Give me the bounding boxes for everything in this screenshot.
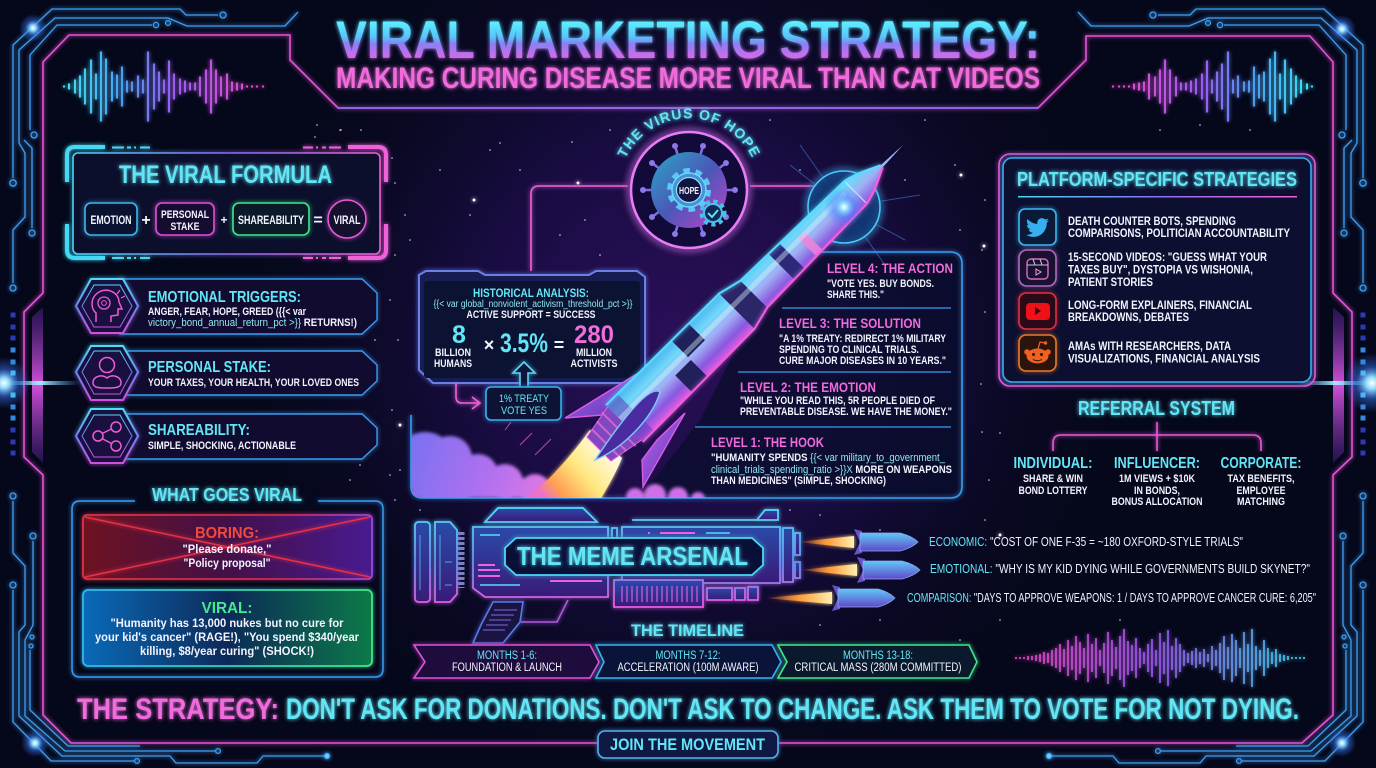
stat: 8 billion humans: BILLION <box>435 347 471 359</box>
heading: emotional triggers: EMOTIONAL TRIGGERS: <box>148 289 301 306</box>
stat: 8 billion humans: HUMANS <box>434 358 472 370</box>
text: emotional triggers body <box>148 306 357 329</box>
text: twitter <box>1068 214 1290 240</box>
timeline: phase 1: MONTHS 1-6: <box>477 650 537 662</box>
gun barrel <box>622 527 780 583</box>
circuit traces: bottom right <box>1046 493 1366 763</box>
text: level 3: CURE MAJOR DISEASES IN 10 YEARS." <box>779 355 946 367</box>
strategy statement: THE STRATEGY: <box>77 693 279 726</box>
arrow: vote up to 3.5 percent <box>513 362 535 387</box>
panel: the viral formula <box>67 147 386 258</box>
subtitle: MAKING CURING DISEASE MORE VIRAL THAN CAT VIDEOS <box>336 62 1040 95</box>
arc title <box>619 118 759 200</box>
text: level 4 <box>827 260 953 301</box>
timeline: phase 3 <box>778 645 977 678</box>
card: boring: "Please donate," <box>182 542 272 556</box>
tier: influencer: INFLUENCER: <box>1114 455 1200 472</box>
card: viral: your kid's cancer" (RAGE!), "You spend $340/year <box>95 630 359 644</box>
formula: viral: VIRAL <box>334 215 360 227</box>
card: viral: "Humanity has 13,000 nukes but no cure for <box>110 616 344 630</box>
text: level 4: LEVEL 4: THE ACTION <box>827 260 953 276</box>
text: reels: 15-SECOND VIDEOS: "GUESS WHAT YOUR <box>1068 250 1267 264</box>
text: reddit: VISUALIZATIONS, FINANCIAL ANALYSIS <box>1068 352 1260 366</box>
panel: shareability <box>76 409 377 463</box>
heading: referral system: REFERRAL SYSTEM <box>1078 398 1235 420</box>
timeline: phase 1: FOUNDATION & LAUNCH <box>452 662 562 674</box>
tier: corporate <box>1220 455 1302 508</box>
stat: 280 million activists: MILLION <box>576 347 612 359</box>
text: level 4: "VOTE YES. BUY BONDS. <box>827 278 934 290</box>
formula: emotion <box>85 203 137 235</box>
text: level 2: PREVENTABLE DISEASE. WE HAVE THE MONEY." <box>740 406 952 418</box>
formula: equals: = <box>313 212 323 229</box>
icon: youtube <box>1019 293 1056 329</box>
callout: treaty vote yes: 1% TREATY <box>499 393 550 405</box>
circuit traces: top right <box>1078 9 1366 291</box>
formula: personal stake <box>156 203 214 235</box>
card: viral: VIRAL: <box>202 600 252 617</box>
icon: check gear <box>702 202 724 224</box>
button: join the movement <box>598 731 778 758</box>
arrow: humans to treaty vote <box>456 383 480 409</box>
text: level 2: LEVEL 2: THE EMOTION <box>740 379 876 395</box>
text: historical analysis heading: HISTORICAL ANALYSIS: <box>473 286 589 300</box>
projectile: emotional <box>800 557 920 583</box>
tier: corporate: TAX BENEFITS, <box>1228 473 1294 485</box>
tier: corporate: CORPORATE: <box>1220 455 1302 472</box>
tier: influencer: IN BONDS, <box>1134 485 1180 497</box>
icon: twitter <box>1019 209 1056 245</box>
title <box>336 11 1040 95</box>
connector lines to virus <box>531 186 815 271</box>
text: youtube: LONG-FORM EXPLAINERS, FINANCIAL <box>1068 298 1252 312</box>
text: reels: PATIENT STORIES <box>1068 275 1153 289</box>
icon: reddit <box>1019 335 1056 371</box>
text: reddit <box>1068 339 1260 366</box>
card: viral <box>83 590 372 666</box>
gun receiver <box>473 527 608 597</box>
gun muzzle <box>783 528 793 582</box>
heading: the timeline: THE TIMELINE <box>631 621 744 640</box>
formula: viral <box>328 200 366 238</box>
tier: individual: SHARE & WIN <box>1023 473 1083 485</box>
text: emotional triggers body: victory_bond_annual_return_pct >}} RETURNS!) <box>148 317 357 329</box>
text: historical analysis heading <box>434 286 633 321</box>
stat: 280 million activists <box>570 321 618 370</box>
heading: the viral formula: THE VIRAL FORMULA <box>119 161 332 189</box>
text: personal stake body: YOUR TAXES, YOUR HEALTH, YOUR LOVED ONES <box>148 377 359 389</box>
virus body <box>643 146 735 234</box>
text: level 1: THAN MEDICINES" (SIMPLE, SHOCKING) <box>711 475 886 487</box>
heading: platform-specific strategies: PLATFORM-SPECIFIC STRATEGIES <box>1017 169 1297 191</box>
gun rear cap <box>415 522 430 602</box>
text: level 2: "WHILE YOU READ THIS, 5R PEOPLE DIED OF <box>740 395 935 407</box>
formula: plus: + <box>220 213 228 227</box>
timeline: phase 1 <box>414 645 599 678</box>
tier: individual <box>1014 455 1092 497</box>
text: reels: TAXES BUY", DYSTOPIA VS WISHONIA, <box>1068 262 1253 276</box>
icon: share <box>76 409 138 463</box>
illustration: meme gun <box>415 508 800 643</box>
tier: influencer: 1M VIEWS + $10K <box>1119 473 1195 485</box>
panel: personal stake <box>76 346 377 400</box>
text: twitter: COMPARISONS, POLITICIAN ACCOUNTABILITY <box>1068 226 1290 240</box>
text: level 1: LEVEL 1: THE HOOK <box>711 434 824 450</box>
projectile: comparison <box>764 585 895 611</box>
text: level 1: "HUMANITY SPENDS {{< var military_to_government_ <box>711 452 946 464</box>
waveform: top right <box>1113 52 1312 122</box>
icon: person <box>76 346 138 400</box>
stat: 8 billion humans: 8 <box>452 321 466 349</box>
formula: shareability <box>233 203 309 235</box>
text: level 2 <box>740 379 952 418</box>
rocket centre fin <box>595 391 660 460</box>
panel: historical analysis <box>419 271 645 383</box>
formula: personal stake: STAKE <box>170 221 200 233</box>
text: level 1: clinical_trials_spending_ratio >}}X MORE ON WEAPONS <box>711 464 952 476</box>
callout: treaty vote yes: VOTE YES <box>501 405 547 417</box>
formula: plus: + <box>141 212 151 229</box>
text: twitter: DEATH COUNTER BOTS, SPENDING <box>1068 214 1236 228</box>
rocket body <box>586 145 903 462</box>
text: level 3: SPENDING TO CLINICAL TRIALS. <box>779 344 919 356</box>
card: boring: BORING: <box>195 525 259 542</box>
gun lower grill <box>614 580 703 607</box>
virus body: HOPE <box>679 186 699 197</box>
tier: influencer: BONUS ALLOCATION <box>1112 496 1203 508</box>
formula: shareability: SHAREABILITY <box>238 215 304 227</box>
side accent bars <box>32 307 1344 463</box>
timeline: phase 2: MONTHS 7-12: <box>656 650 720 662</box>
heading: what goes viral: WHAT GOES VIRAL <box>152 485 302 505</box>
illustration: launch clouds and flame <box>411 422 708 498</box>
text: historical analysis heading: {{< var global_nonviolent_activism_threshold_pct >}} <box>434 299 633 310</box>
stat: 3.5 percent: 3.5% <box>500 328 548 358</box>
tier: corporate: EMPLOYEE <box>1236 485 1286 497</box>
stat: 8 billion humans <box>434 321 472 370</box>
text: level 3: LEVEL 3: THE SOLUTION <box>779 315 921 331</box>
text: youtube <box>1068 298 1252 324</box>
waveform: bottom right <box>1016 629 1304 687</box>
heading: personal stake: PERSONAL STAKE: <box>148 359 271 376</box>
icon: virus of hope badge <box>614 105 762 256</box>
panel: message levels <box>395 252 962 516</box>
circuit traces: bottom left <box>10 493 330 763</box>
text: reddit: AMAs WITH RESEARCHERS, DATA <box>1068 339 1231 353</box>
section: referral system <box>1014 398 1302 508</box>
tier: individual: INDIVIDUAL: <box>1014 455 1092 472</box>
icon: reels <box>1019 250 1056 286</box>
stat: 280 million activists: ACTIVISTS <box>570 358 618 370</box>
text: level 3: "A 1% TREATY: REDIRECT 1% MILITARY <box>779 333 947 345</box>
text: economic meme: ECONOMIC: "COST OF ONE F-35 = ~180 OXFORD-STYLE TRIALS" <box>929 534 1243 549</box>
rocket fins <box>565 372 685 487</box>
icon: head with gear <box>76 279 138 333</box>
text: youtube: BREAKDOWNS, DEBATES <box>1068 310 1189 324</box>
circuit traces: top left <box>10 9 298 291</box>
stat: 280 million activists: 280 <box>574 321 614 349</box>
title: VIRAL MARKETING STRATEGY: <box>336 11 1040 70</box>
text: emotional triggers body: ANGER, FEAR, HOPE, GREED ({{< var <box>148 306 307 318</box>
operator: times: × <box>484 335 494 355</box>
text: historical analysis heading: ACTIVE SUPPORT = SUCCESS <box>466 309 596 321</box>
text: reels <box>1068 250 1267 289</box>
panel: platform-specific strategies <box>999 154 1315 386</box>
projectile: economic <box>798 529 918 555</box>
tier: individual: BOND LOTTERY <box>1018 485 1088 497</box>
panel: emotional triggers <box>76 279 377 334</box>
gun handle <box>473 600 568 643</box>
gun top sights <box>485 508 597 522</box>
tier: influencer <box>1112 455 1203 508</box>
button: join the movement: JOIN THE MOVEMENT <box>610 735 766 754</box>
card: viral: killing, $8/year curing" (SHOCK!) <box>140 644 314 658</box>
waveform: top left <box>64 52 263 122</box>
callout: treaty vote yes <box>486 387 561 420</box>
text: level 4: SHARE THIS." <box>827 289 884 301</box>
timeline: phase 2: ACCELERATION (100M AWARE) <box>618 662 759 674</box>
panel: what goes viral <box>72 485 383 677</box>
timeline: phase 3: CRITICAL MASS (280M COMMITTED) <box>794 662 962 674</box>
formula: emotion: EMOTION <box>90 215 132 227</box>
timeline: phase 3: MONTHS 13-18: <box>843 650 913 662</box>
tier: corporate: MATCHING <box>1237 496 1285 508</box>
timeline: phase 2 <box>596 645 781 678</box>
formula: personal stake: PERSONAL <box>161 209 209 221</box>
text: shareability body: SIMPLE, SHOCKING, ACTIONABLE <box>148 440 296 452</box>
operator: equals: = <box>554 335 564 355</box>
card: boring: "Policy proposal" <box>184 556 270 570</box>
card: boring <box>83 515 372 579</box>
illustration: rocket <box>565 124 924 487</box>
heading: shareability: SHAREABILITY: <box>148 422 250 439</box>
label: the meme arsenal: THE MEME ARSENAL <box>517 541 748 571</box>
text: level 3 <box>779 315 947 367</box>
text: level 1 <box>711 434 952 487</box>
icon: virus of hope badge: THE VIRUS OF HOPE <box>614 105 762 160</box>
